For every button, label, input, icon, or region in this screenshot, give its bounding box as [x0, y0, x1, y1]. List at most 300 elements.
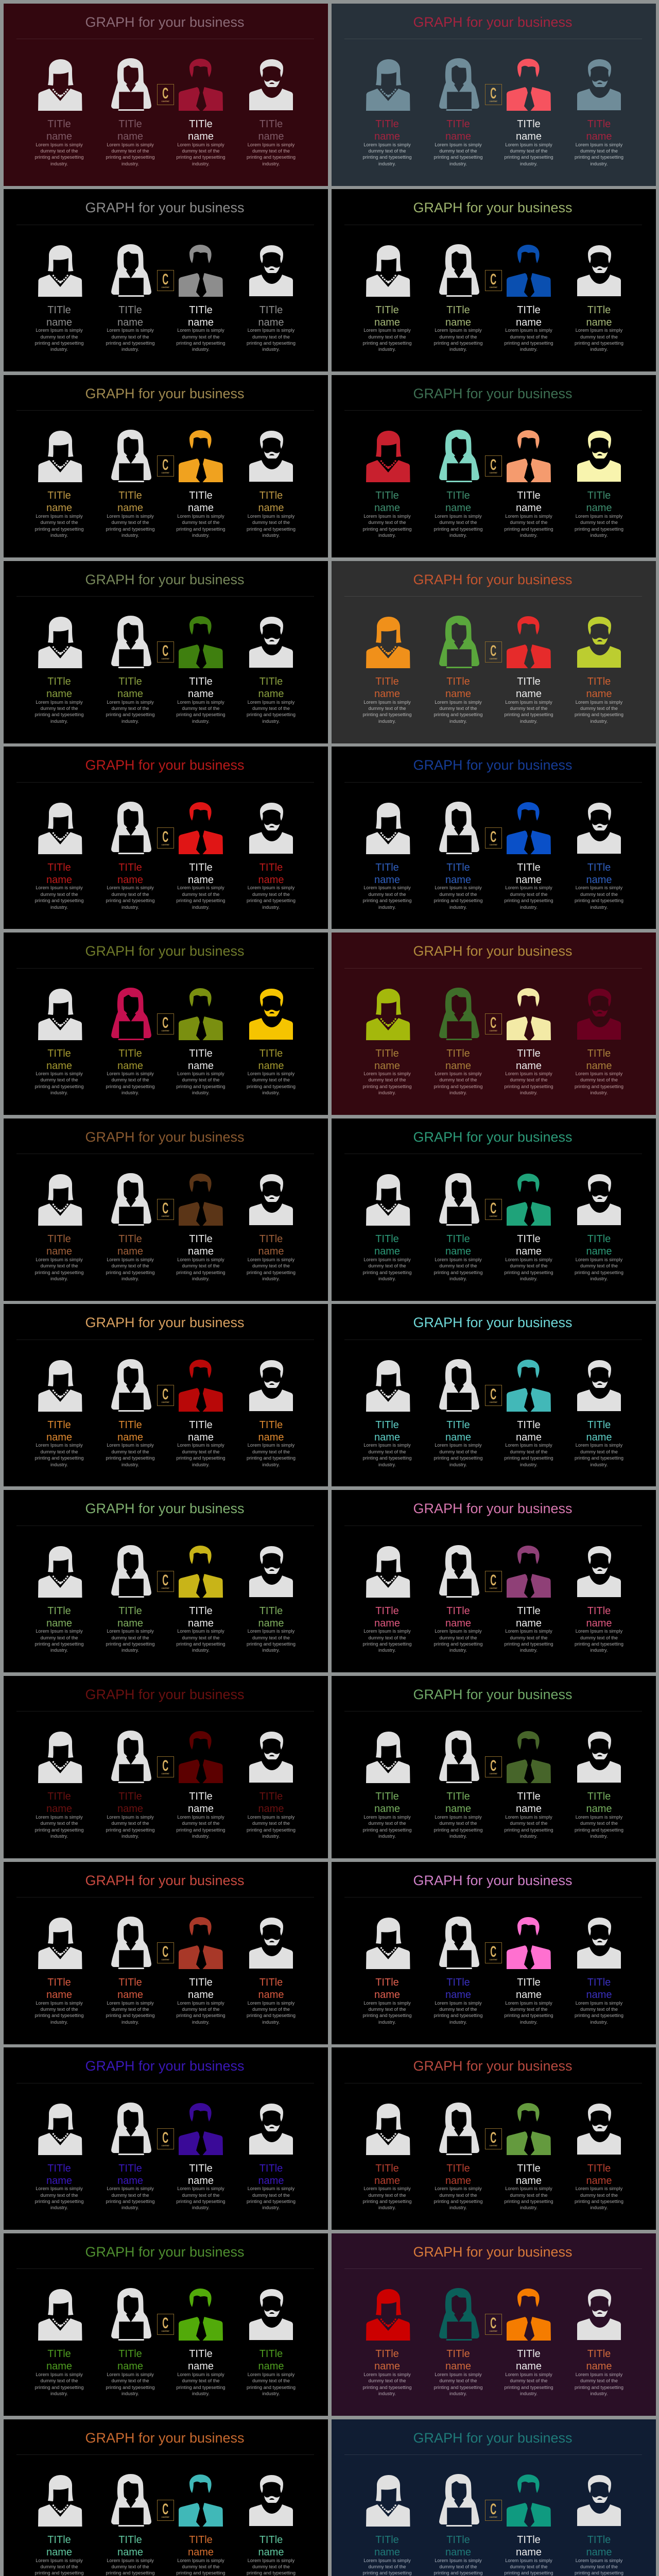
- label: name: [188, 1432, 214, 1443]
- logo: CONTENT: [162, 1215, 169, 1217]
- label: [99, 489, 161, 514]
- panel: slide 25 lime accent: [3, 2233, 328, 2416]
- description: dummy text of the: [439, 1263, 477, 1268]
- description: industry.: [449, 905, 467, 910]
- description: Lorem Ipsum is simply: [363, 885, 411, 890]
- logo: C: [490, 271, 496, 288]
- description: printing and typesetting: [575, 527, 623, 532]
- heading: GRAPH for your business: [413, 2244, 573, 2260]
- icon: bearded man: [577, 59, 621, 110]
- card: person 2: [99, 1359, 161, 1470]
- description: Lorem Ipsum is simply: [36, 2558, 83, 2563]
- logo: CONTENT: [490, 2144, 497, 2147]
- label: name: [586, 2547, 612, 2558]
- description: dummy text of the: [580, 1821, 618, 1826]
- card: person 4: [240, 244, 302, 355]
- label: name: [117, 2361, 143, 2372]
- description: Lorem Ipsum is simply: [107, 142, 154, 147]
- description: Lorem Ipsum is simply: [435, 1815, 482, 1820]
- description: dummy text of the: [368, 1635, 406, 1640]
- panel: slide 28 navy: [332, 2419, 656, 2576]
- label: [427, 2534, 489, 2558]
- label: TITle: [446, 1605, 470, 1617]
- description: industry.: [50, 1276, 68, 1281]
- description: dummy text of the: [182, 2007, 220, 2012]
- card: person 4: [240, 1174, 302, 1285]
- icon: man with tie: [179, 2103, 223, 2157]
- panel: slide 19 dark red accent: [3, 1676, 328, 1858]
- card: person 2: [427, 988, 489, 1099]
- logo: C: [490, 1757, 496, 1774]
- description: industry.: [262, 1834, 280, 1839]
- card: person 2: [99, 616, 161, 727]
- icon: woman with laptop: [111, 430, 155, 483]
- description: industry.: [192, 2020, 210, 2025]
- label: [356, 489, 418, 514]
- card: person 3: [170, 430, 232, 541]
- description: printing and typesetting: [34, 527, 83, 532]
- label: name: [586, 1989, 612, 2001]
- label: [356, 675, 418, 700]
- logo: CONTENT: [162, 2144, 169, 2147]
- label: [568, 489, 630, 514]
- label: name: [188, 502, 214, 514]
- panel: slide 3 grey accent: [3, 189, 328, 371]
- icon: woman with necklace: [38, 1918, 82, 1971]
- description: printing and typesetting: [504, 2199, 553, 2204]
- card: person 1: [34, 245, 83, 352]
- heading: GRAPH for your business: [85, 1501, 245, 1516]
- description: Lorem Ipsum is simply: [576, 1443, 622, 1448]
- description: Lorem Ipsum is simply: [248, 514, 294, 519]
- description: printing and typesetting: [176, 527, 226, 532]
- label: [28, 1605, 90, 1630]
- description: industry.: [50, 2391, 68, 2396]
- heading: GRAPH for your business: [85, 943, 245, 959]
- description: Lorem Ipsum is simply: [107, 1443, 154, 1448]
- label: [498, 1047, 560, 1072]
- description: [498, 699, 560, 724]
- description: [170, 2185, 232, 2211]
- label: [586, 118, 612, 142]
- label: TITle: [47, 304, 71, 316]
- card: person 4: [240, 2103, 302, 2214]
- label: name: [516, 131, 542, 142]
- logo: C: [162, 271, 168, 288]
- label: [170, 1605, 232, 1630]
- label: TITle: [517, 1791, 541, 1802]
- logo: CONTENT: [162, 1958, 169, 1961]
- label: TITle: [118, 2163, 142, 2174]
- label: name: [117, 1803, 143, 1815]
- label: name: [46, 2547, 72, 2558]
- icon: man with tie: [179, 616, 223, 670]
- label: TITle: [259, 1233, 283, 1245]
- label: [240, 675, 302, 700]
- icon: bearded man: [577, 431, 621, 484]
- label: name: [46, 317, 72, 328]
- description: printing and typesetting: [176, 1084, 226, 1089]
- label: name: [46, 131, 72, 142]
- label: [427, 1790, 489, 1815]
- logo: CONTENT: [162, 2516, 169, 2518]
- logo: C: [490, 1943, 496, 1960]
- description: Lorem Ipsum is simply: [435, 142, 482, 147]
- panel: slide 10 bright blue accent: [332, 747, 656, 929]
- icon: man with tie: [507, 245, 551, 298]
- icon: woman with necklace: [366, 2289, 410, 2343]
- label: TITle: [375, 490, 399, 501]
- description: industry.: [122, 1834, 139, 1839]
- card: person 4: [240, 1545, 302, 1656]
- description: [99, 1814, 161, 1839]
- logo: [157, 84, 174, 105]
- label: TITle: [517, 1233, 541, 1245]
- card: person 3: [498, 430, 560, 541]
- label: TITle: [446, 2534, 470, 2546]
- description: printing and typesetting: [575, 2013, 623, 2018]
- card: person 3: [170, 616, 232, 727]
- description: dummy text of the: [510, 520, 548, 525]
- description: [498, 1257, 560, 1282]
- label: [498, 2534, 560, 2558]
- description: [498, 2557, 560, 2576]
- label: TITle: [587, 1233, 611, 1245]
- description: dummy text of the: [580, 1449, 618, 1454]
- label: [240, 2162, 302, 2187]
- label: [99, 1047, 161, 1072]
- label: TITle: [189, 862, 213, 873]
- description: Lorem Ipsum is simply: [363, 1257, 411, 1262]
- label: TITle: [587, 676, 611, 687]
- icon: bearded man: [249, 988, 293, 1042]
- description: dummy text of the: [368, 2378, 406, 2383]
- description: printing and typesetting: [504, 2570, 553, 2575]
- icon: woman with necklace: [366, 1918, 410, 1971]
- card: person 2: [106, 58, 154, 166]
- label: TITle: [259, 490, 283, 501]
- label: [356, 1047, 418, 1072]
- description: dummy text of the: [510, 1635, 548, 1640]
- label: TITle: [587, 1419, 611, 1431]
- label: [240, 861, 302, 886]
- description: printing and typesetting: [106, 1827, 154, 1833]
- label: TITle: [375, 2163, 399, 2174]
- description: industry.: [262, 719, 280, 724]
- description: printing and typesetting: [176, 1641, 226, 1647]
- panel: slide 12 maroon multicolour: [332, 933, 656, 1115]
- icon: bearded man: [249, 59, 293, 110]
- description: [170, 699, 232, 724]
- description: dummy text of the: [252, 2193, 290, 2198]
- description: Lorem Ipsum is simply: [435, 2000, 482, 2005]
- description: dummy text of the: [182, 1263, 220, 1268]
- label: name: [586, 502, 612, 514]
- label: TITle: [118, 304, 142, 316]
- description: industry.: [590, 2391, 608, 2396]
- label: TITle: [118, 1233, 142, 1245]
- label: TITle: [259, 304, 283, 316]
- label: [356, 861, 418, 886]
- description: dummy text of the: [111, 2378, 149, 2383]
- description: dummy text of the: [111, 1077, 149, 1082]
- heading: GRAPH for your business: [413, 386, 573, 401]
- panel: slide 8 charcoal multicolour: [332, 561, 656, 743]
- logo: [157, 2128, 174, 2149]
- panel: slide 17 mustard accent: [3, 1490, 328, 1672]
- card: person 2: [427, 616, 489, 727]
- icon: bearded man: [249, 1546, 293, 1600]
- description: industry.: [378, 347, 396, 352]
- description: Lorem Ipsum is simply: [363, 142, 411, 147]
- icon: man with tie: [507, 59, 551, 111]
- description: [427, 1814, 489, 1839]
- label: name: [117, 1060, 143, 1072]
- description: industry.: [122, 1276, 139, 1281]
- description: dummy text of the: [40, 2007, 78, 2012]
- label: [374, 118, 400, 142]
- description: Lorem Ipsum is simply: [248, 885, 294, 890]
- card: person 2: [99, 802, 161, 913]
- description: [356, 1071, 418, 1096]
- description: printing and typesetting: [247, 341, 296, 346]
- panel: slide 11 magenta olive yellow: [3, 933, 328, 1115]
- label: TITle: [189, 1048, 213, 1059]
- icon: woman with laptop: [439, 616, 483, 669]
- description: Lorem Ipsum is simply: [107, 1815, 154, 1820]
- logo: CONTENT: [490, 1401, 497, 1403]
- icon: woman with laptop: [111, 1545, 155, 1599]
- description: printing and typesetting: [504, 155, 553, 160]
- label: name: [188, 874, 214, 886]
- label: name: [374, 1618, 400, 1629]
- logo: CONTENT: [490, 657, 497, 660]
- logo: C: [162, 1386, 168, 1403]
- label: TITle: [118, 2348, 142, 2360]
- heading: GRAPH for your business: [413, 14, 573, 30]
- label: name: [445, 2361, 471, 2372]
- label: [568, 1976, 630, 2001]
- description: Lorem Ipsum is simply: [107, 2372, 154, 2377]
- label: name: [188, 317, 214, 328]
- heading: GRAPH for your business: [85, 1315, 245, 1330]
- card: person 2: [99, 2289, 161, 2400]
- description: printing and typesetting: [575, 1455, 623, 1461]
- description: dummy text of the: [510, 148, 548, 154]
- label: name: [258, 317, 284, 328]
- heading: GRAPH for your business: [413, 1129, 573, 1145]
- description: dummy text of the: [252, 334, 290, 340]
- description: dummy text of the: [111, 2564, 149, 2569]
- description: printing and typesetting: [106, 1269, 154, 1275]
- label: name: [586, 131, 612, 142]
- panel: slide 15 deep red accent: [3, 1304, 328, 1486]
- label: name: [374, 1060, 400, 1072]
- description: Lorem Ipsum is simply: [248, 2186, 294, 2191]
- description: [427, 1628, 489, 1654]
- description: dummy text of the: [580, 148, 618, 154]
- label: [498, 2348, 560, 2372]
- label: [356, 2162, 418, 2187]
- heading: GRAPH for your business: [413, 572, 573, 587]
- label: name: [258, 1246, 284, 1257]
- description: dummy text of the: [368, 1449, 406, 1454]
- card: person 1: [356, 616, 418, 727]
- label: TITle: [587, 862, 611, 873]
- description: printing and typesetting: [362, 527, 412, 532]
- label: [170, 489, 232, 514]
- label: [170, 1419, 232, 1444]
- icon: woman with laptop: [439, 1917, 483, 1970]
- description: [568, 2000, 630, 2025]
- description: dummy text of the: [439, 1821, 477, 1826]
- description: Lorem Ipsum is simply: [576, 328, 622, 333]
- icon: woman with necklace: [366, 1546, 410, 1600]
- logo: CONTENT: [162, 843, 169, 846]
- label: [568, 1419, 630, 1444]
- description: [568, 885, 630, 910]
- description: dummy text of the: [439, 706, 477, 711]
- description: [362, 142, 412, 166]
- description: dummy text of the: [252, 148, 290, 154]
- icon: man with tie: [507, 2103, 551, 2157]
- description: dummy text of the: [40, 1635, 78, 1640]
- card: person 1: [34, 59, 83, 166]
- description: [106, 142, 154, 166]
- panel: slide 18 plum accent: [332, 1490, 656, 1672]
- description: Lorem Ipsum is simply: [107, 2186, 154, 2191]
- label: [99, 2162, 161, 2187]
- card: person 4: [568, 1174, 630, 1285]
- logo: [157, 1013, 174, 1035]
- description: Lorem Ipsum is simply: [363, 1443, 411, 1448]
- icon: woman with laptop: [439, 1545, 483, 1599]
- label: TITle: [375, 1048, 399, 1059]
- description: dummy text of the: [252, 1263, 290, 1268]
- description: printing and typesetting: [34, 1084, 83, 1089]
- description: printing and typesetting: [433, 2385, 483, 2390]
- label: [28, 2348, 90, 2372]
- description: dummy text of the: [252, 2564, 290, 2569]
- description: printing and typesetting: [362, 2199, 412, 2204]
- description: Lorem Ipsum is simply: [505, 1815, 552, 1820]
- description: [498, 885, 560, 910]
- description: [427, 2557, 489, 2576]
- description: [356, 327, 418, 353]
- label: TITle: [118, 1048, 142, 1059]
- label: TITle: [446, 676, 470, 687]
- label: name: [586, 874, 612, 886]
- label: TITle: [259, 2163, 283, 2174]
- label: TITle: [517, 1419, 541, 1431]
- description: dummy text of the: [111, 2007, 149, 2012]
- card: person 3: [170, 1917, 232, 2028]
- description: industry.: [378, 1276, 396, 1281]
- logo: [485, 1385, 501, 1406]
- description: dummy text of the: [580, 334, 618, 340]
- description: industry.: [590, 1276, 608, 1281]
- icon: bearded man: [577, 2289, 621, 2343]
- icon: woman with necklace: [366, 1732, 410, 1785]
- logo: CONTENT: [490, 1587, 497, 1589]
- icon: woman with necklace: [38, 245, 82, 297]
- description: Lorem Ipsum is simply: [435, 1443, 482, 1448]
- description: industry.: [50, 161, 68, 166]
- icon: woman with necklace: [366, 1360, 410, 1414]
- label: TITle: [587, 1791, 611, 1802]
- label: TITle: [118, 1791, 142, 1802]
- description: [170, 1442, 232, 1468]
- label: [498, 2162, 560, 2187]
- icon: woman with necklace: [38, 988, 82, 1042]
- description: [170, 513, 232, 539]
- description: dummy text of the: [368, 334, 406, 340]
- description: printing and typesetting: [34, 155, 83, 160]
- description: industry.: [122, 1462, 139, 1467]
- heading: GRAPH for your business: [413, 943, 573, 959]
- card: person 4: [568, 802, 630, 913]
- card: person 3: [170, 2103, 232, 2214]
- description: dummy text of the: [111, 334, 149, 340]
- label: TITle: [118, 118, 142, 130]
- icon: woman with necklace: [38, 2104, 82, 2157]
- logo: C: [490, 456, 496, 473]
- label: name: [258, 1432, 284, 1443]
- description: dummy text of the: [252, 892, 290, 897]
- icon: man with tie: [507, 1731, 551, 1785]
- description: industry.: [262, 347, 280, 352]
- label: name: [188, 1060, 214, 1072]
- description: printing and typesetting: [362, 1084, 412, 1089]
- label: name: [445, 2175, 471, 2187]
- description: dummy text of the: [580, 2007, 618, 2012]
- description: printing and typesetting: [247, 2013, 296, 2018]
- icon: bearded man: [577, 1174, 621, 1228]
- icon: bearded man: [577, 2104, 621, 2157]
- description: printing and typesetting: [176, 1827, 226, 1833]
- description: [99, 699, 161, 724]
- logo: C: [162, 85, 168, 102]
- description: [170, 1257, 232, 1282]
- description: [427, 1071, 489, 1096]
- label: name: [117, 874, 143, 886]
- description: [28, 2000, 90, 2025]
- card: person 3: [498, 1359, 560, 1470]
- logo: [485, 2314, 501, 2335]
- description: industry.: [50, 719, 68, 724]
- description: dummy text of the: [182, 2193, 220, 2198]
- icon: man with tie: [507, 1917, 551, 1971]
- label: [99, 1233, 161, 1258]
- icon: bearded man: [249, 2475, 293, 2529]
- icon: man with tie: [179, 2289, 223, 2342]
- description: dummy text of the: [40, 892, 78, 897]
- label: name: [46, 1803, 72, 1815]
- description: Lorem Ipsum is simply: [177, 2558, 224, 2563]
- label: TITle: [587, 2163, 611, 2174]
- description: printing and typesetting: [247, 1084, 296, 1089]
- description: [356, 2185, 418, 2211]
- label: [99, 2534, 161, 2558]
- label: name: [46, 688, 72, 700]
- label: name: [516, 2547, 542, 2558]
- label: TITle: [517, 304, 541, 316]
- card: person 2: [433, 58, 483, 166]
- description: dummy text of the: [439, 334, 477, 340]
- description: printing and typesetting: [433, 898, 483, 903]
- description: industry.: [378, 533, 396, 538]
- description: Lorem Ipsum is simply: [177, 2372, 224, 2377]
